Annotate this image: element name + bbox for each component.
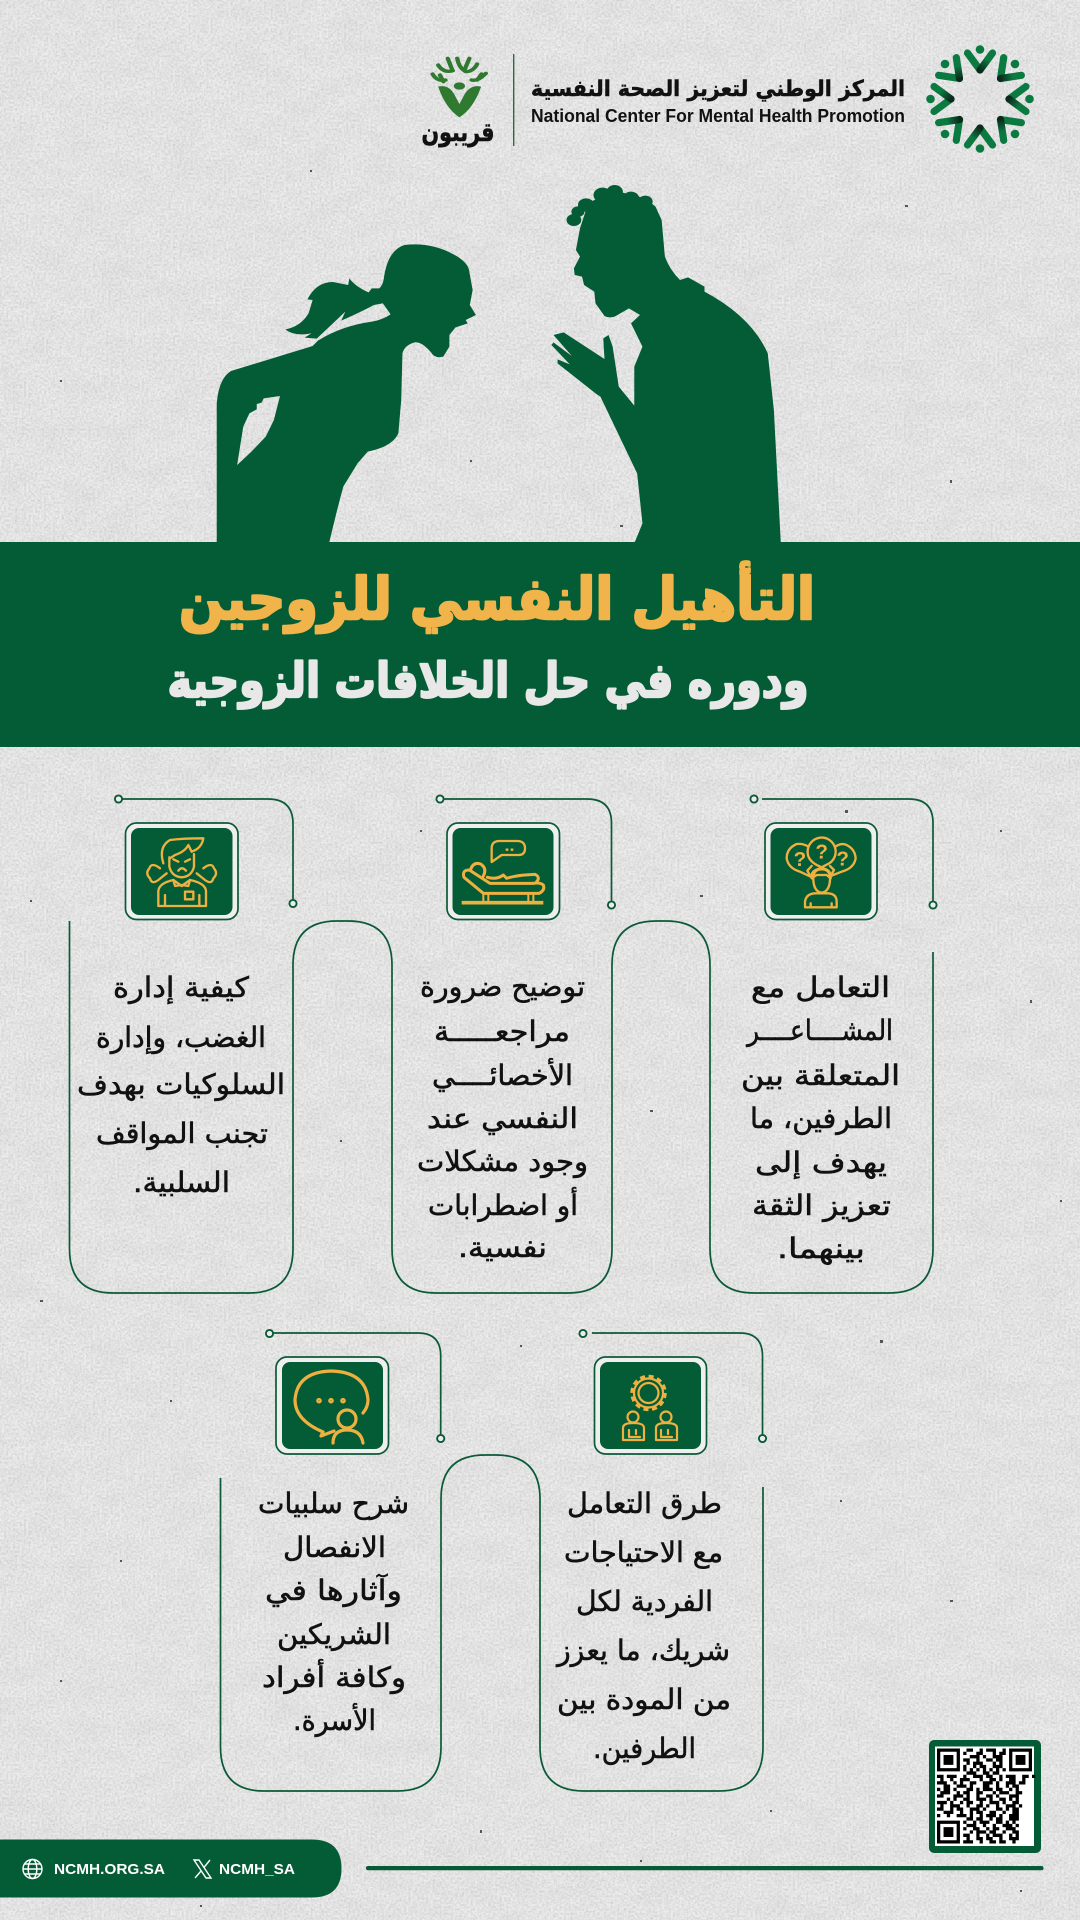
logo: qareeboon [422,58,494,148]
icon: angry man [147,838,216,906]
card text: من المودة بين [557,1683,731,1716]
card text: تعزيز الثقة [752,1189,891,1222]
card text: نفسية. [458,1231,547,1264]
card text [258,1487,409,1737]
panel: card 4 individual needs [555,1330,766,1765]
card text: شريك، ما يعزز [555,1634,730,1667]
card text: الطرفين، ما [750,1102,892,1135]
card text [417,970,588,1264]
card text [741,971,900,1265]
icon: globe [23,1860,42,1878]
panel: card 3 anger [77,795,297,1199]
card text: توضيح ضرورة [420,970,585,1003]
silhouette: woman with ponytail [217,244,476,543]
icon: speech bubble with person [295,1371,368,1443]
card text: شرح سلبيات [258,1487,409,1520]
card text: يهدف إلى [755,1146,887,1179]
card text: الأخصائــــي [432,1057,573,1092]
heading: التأهيل النفسي للزوجين [179,561,815,634]
card text: الشريكين [277,1618,391,1651]
icon box [447,823,560,920]
card text: السلوكيات بهدف [77,1068,285,1101]
card text: الفردية لكل [576,1585,713,1618]
icon box [276,1357,388,1454]
panel: card 1 emotions [741,795,937,1265]
organisation name [531,77,905,126]
card text: النفسي عند [427,1102,578,1135]
card text: تجنب المواقف [96,1117,268,1150]
card text: المشــــاعــــر [745,1014,893,1047]
connector [115,795,297,907]
card text [77,971,285,1199]
card text: الطرفين. [593,1732,696,1765]
card text: المتعلقة بين [741,1059,900,1092]
connector [579,1330,766,1442]
title banner [0,542,1080,747]
logo: national center mark [926,45,1034,153]
panel: card 2 specialist [417,795,615,1264]
icon: gear with two people [623,1376,677,1440]
icon box [594,1357,706,1454]
silhouette: man with raised hand [551,185,781,543]
illustration: arguing couple silhouette [217,185,781,543]
icon: person with question bubbles: ? [794,848,806,871]
card text: أو اضطرابات [428,1186,578,1222]
card text [555,1487,731,1765]
card text: طرق التعامل [567,1487,722,1520]
icon: patient on couch [462,841,544,903]
card text: الأسرة. [293,1702,376,1737]
footer pill [0,1840,342,1898]
card text: وآثارها في [265,1574,402,1607]
icon: person with question bubbles: ? [836,847,849,870]
icon: person with question bubbles [787,838,856,907]
connector [750,795,937,909]
icon: x [194,1860,211,1878]
logo wordmark: قريبون [422,118,494,148]
card text: الغضب، وإدارة [96,1021,266,1054]
connector [266,1330,444,1442]
handle: NCMH_SA [219,1861,295,1878]
icon: person with question bubbles: ? [815,840,828,863]
card text: كيفية إدارة [113,971,250,1004]
english name: National Center For Mental Health Promotion [531,105,905,126]
card text: السلبية. [133,1166,230,1199]
connector [436,795,615,909]
card text: وكافة أفراد [262,1658,406,1694]
logo mark [433,58,486,117]
panel: card 5 separation [258,1330,444,1737]
card text: مع الاحتياجات [564,1536,723,1569]
icon box [765,823,877,920]
card text: بينهما. [777,1232,865,1265]
qr code [929,1740,1041,1853]
subheading: ودوره في حل الخلافات الزوجية [168,653,808,709]
card text: مراجعـــــة [434,1015,570,1048]
card text: الانفصال [283,1531,386,1564]
card text: وجود مشكلات [417,1145,588,1178]
arabic name: المركز الوطني لتعزيز الصحة النفسية [531,77,905,102]
icon box [126,823,238,920]
card text: التعامل مع [751,971,890,1004]
website: NCMH.ORG.SA [54,1861,165,1878]
